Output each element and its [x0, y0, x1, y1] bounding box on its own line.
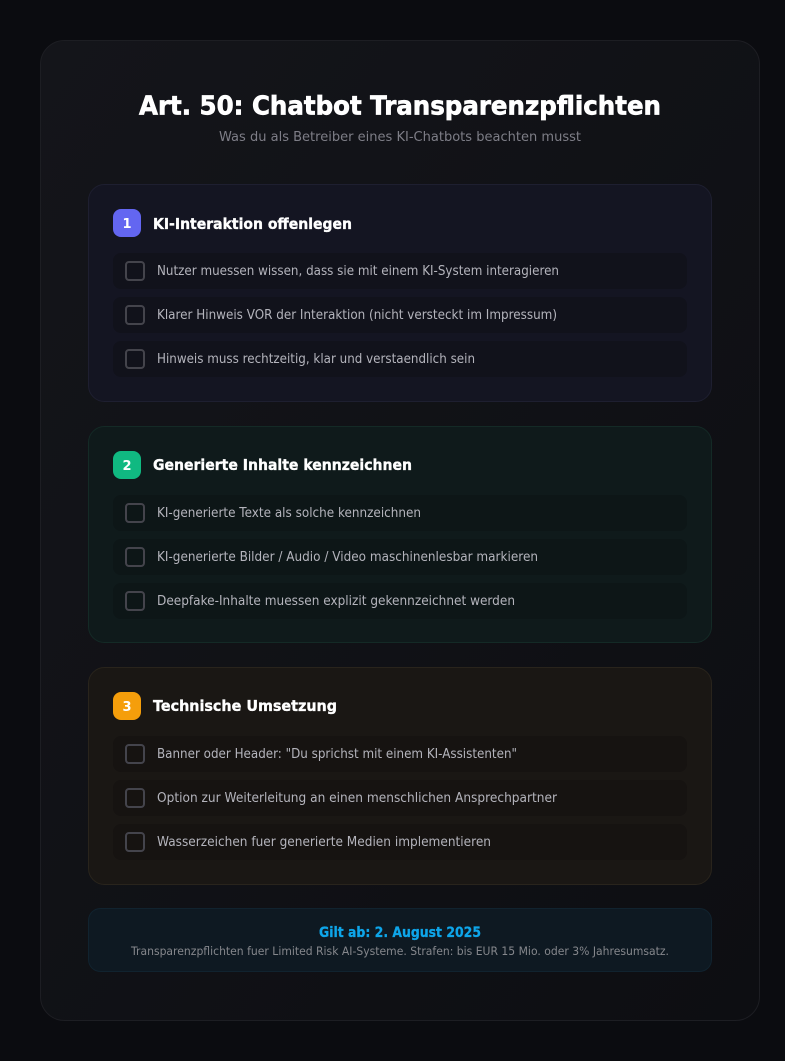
item 2.1: [113, 495, 687, 531]
panel: KI-Interaktion offenlegen: [88, 184, 712, 402]
item 2.1: KI-generierte Texte als solche kennzeichnen: [157, 506, 421, 521]
title: Art. 50: Chatbot Transparenzpflichten: [139, 92, 661, 122]
item 3.2: [113, 780, 687, 816]
item 3.1: [113, 736, 687, 772]
panel: Technische Umsetzung: [88, 668, 712, 884]
badge 1: 1: [122, 217, 132, 232]
item 1.2: [113, 297, 687, 333]
item 1.3: Hinweis muss rechtzeitig, klar und verstaendlich sein: [157, 352, 475, 367]
heading 1: KI-Interaktion offenlegen: [153, 215, 352, 233]
item 2.2: KI-generierte Bilder / Audio / Video maschinenlesbar markieren: [157, 550, 538, 565]
badge 2: 2: [122, 459, 132, 474]
item 3.3: Wasserzeichen fuer generierte Medien implementieren: [157, 835, 491, 850]
item 1.1: [113, 253, 687, 289]
footer callout: [88, 908, 712, 972]
item 1.1: Nutzer muessen wissen, dass sie mit einem KI-System interagieren: [157, 264, 559, 279]
item 3.2: Option zur Weiterleitung an einen menschlichen Ansprechpartner: [157, 791, 558, 806]
badge 2: [113, 451, 141, 479]
badge 3: 3: [122, 700, 132, 715]
heading 3: Technische Umsetzung: [153, 697, 337, 715]
item 1.2: Klarer Hinweis VOR der Interaktion (nicht versteckt im Impressum): [157, 308, 557, 323]
badge 3: [113, 692, 141, 720]
item 3.3: [113, 824, 687, 860]
item 2.3: Deepfake-Inhalte muessen explizit gekennzeichnet werden: [157, 594, 515, 609]
heading 2: Generierte Inhalte kennzeichnen: [153, 456, 412, 474]
effective date: Gilt ab: 2. August 2025: [319, 925, 481, 941]
badge 1: [113, 209, 141, 237]
item 1.3: [113, 341, 687, 377]
item 2.2: [113, 539, 687, 575]
item 3.1: Banner oder Header: "Du sprichst mit einem KI-Assistenten": [157, 747, 517, 762]
subtitle: Was du als Betreiber eines KI-Chatbots beachten musst: [219, 129, 581, 145]
penalty note: Transparenzpflichten fuer Limited Risk AI-Systeme. Strafen: bis EUR 15 Mio. oder 3% Jahresumsatz.: [130, 944, 669, 958]
item 2.3: [113, 583, 687, 619]
panel: Generierte Inhalte kennzeichnen: [88, 426, 712, 642]
